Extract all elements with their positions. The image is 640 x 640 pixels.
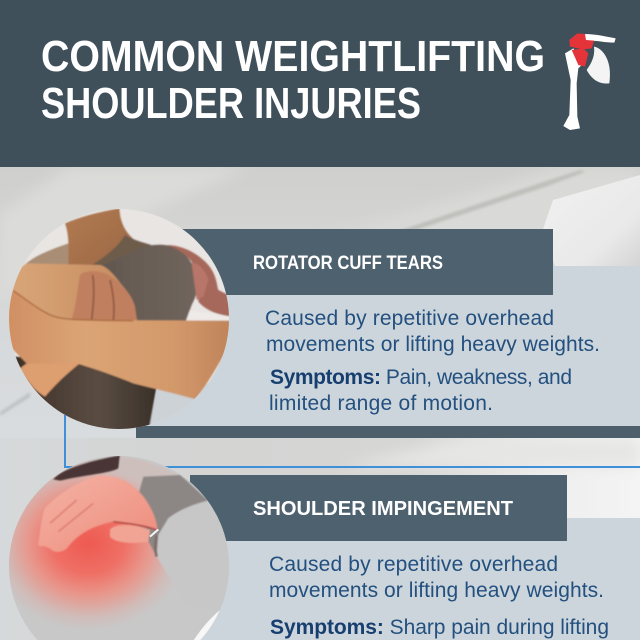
panel bottom strip — [136, 426, 640, 438]
red glow — [9, 464, 226, 623]
description text: Caused by repetitive overhead — [265, 307, 554, 330]
header band — [0, 0, 640, 167]
icon: shoulder bones — [563, 33, 616, 130]
panel: rotator cuff tears — [136, 229, 640, 438]
description text: movements or lifting heavy weights. — [266, 333, 600, 356]
title: COMMON WEIGHTLIFTING — [41, 32, 545, 81]
panel body — [136, 266, 640, 426]
description text — [265, 307, 600, 415]
description text: Symptoms: Sharp pain during lifting — [270, 616, 609, 639]
heading bar — [190, 475, 567, 541]
description text: Caused by repetitive overhead — [269, 553, 558, 576]
title: SHOULDER INJURIES — [41, 79, 421, 128]
description text: Symptoms: Pain, weakness, and — [270, 366, 572, 389]
connector line — [65, 415, 640, 467]
heading: ROTATOR CUFF TEARS — [253, 252, 443, 274]
description text: limited range of motion. — [269, 392, 493, 415]
heading bar — [180, 229, 553, 295]
description text: movements or lifting heavy weights. — [269, 579, 604, 602]
description text — [269, 553, 609, 639]
title — [41, 32, 545, 128]
background — [0, 167, 640, 640]
panel: shoulder impingement — [190, 475, 640, 640]
photo: red inflamed shoulder — [9, 456, 229, 640]
photo: arm holding shoulder — [9, 209, 229, 429]
panel body — [200, 518, 640, 640]
heading: SHOULDER IMPINGEMENT — [253, 498, 513, 520]
